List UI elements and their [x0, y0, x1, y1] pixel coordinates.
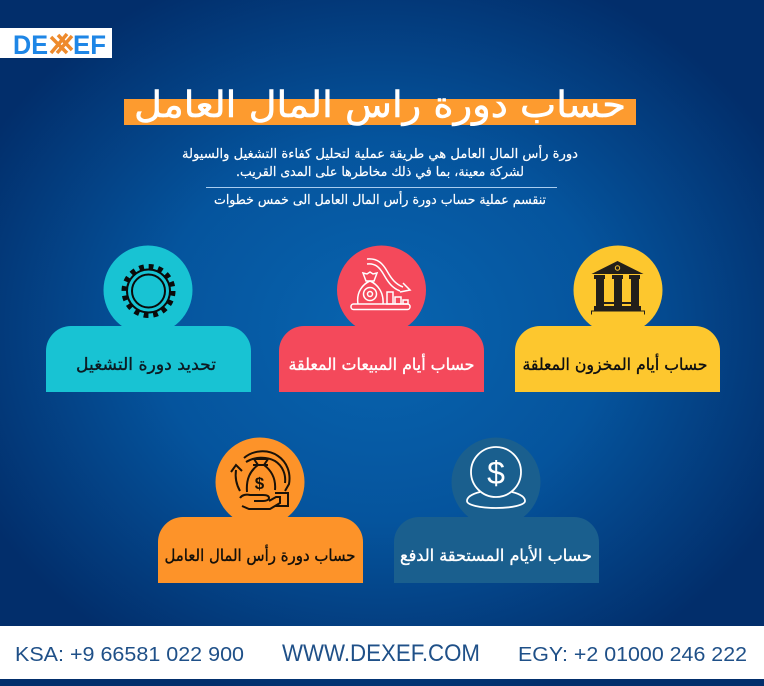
title: حساب دورة راس المال العامل	[134, 85, 626, 126]
footer contact bar: EGY: +2 01000 246 222	[518, 643, 747, 666]
card: days payable outstanding: $	[487, 455, 505, 491]
card: days payable outstanding	[394, 438, 599, 583]
footer contact bar	[0, 626, 764, 679]
icon: gear	[124, 266, 173, 316]
card: days sales outstanding: حساب أيام المبيعات المعلقة	[288, 353, 474, 374]
card: determine operating cycle	[46, 246, 251, 392]
subheading: تنقسم عملية حساب دورة رأس المال العامل الى خمس خطوات	[214, 191, 546, 208]
card: working capital cycle	[158, 438, 363, 583]
logo: DEXEF: DE	[13, 30, 48, 60]
footer contact bar: KSA: +9 66581 022 900	[15, 643, 244, 666]
intro text	[182, 145, 578, 180]
intro text: لشركة معينة، بما في ذلك مخاطرها على المدى القريب.	[236, 165, 524, 180]
card: working capital cycle: حساب دورة رأس المال العامل	[164, 544, 356, 566]
card: determine operating cycle: تحديد دورة التشغيل	[76, 355, 216, 375]
logo: DEXEF: EF	[73, 30, 106, 60]
card: days payable outstanding: حساب الأيام المستحقة الدفع	[400, 545, 592, 566]
card: days inventory outstanding: حساب أيام المخزون المعلقة	[522, 353, 708, 375]
logo: DEXEF	[0, 28, 112, 60]
card: working capital cycle: $	[255, 474, 265, 493]
icon: money bag with falling chart	[351, 259, 410, 310]
icon: money bag on hand with cycle arrows	[231, 451, 290, 509]
icon: bank building	[591, 261, 645, 314]
footer contact bar: WWW.DEXEF.COM	[282, 640, 480, 667]
card: days inventory outstanding	[515, 246, 720, 392]
icon: dollar coin on ring	[467, 447, 525, 508]
card: days sales outstanding	[279, 246, 484, 392]
intro text: دورة رأس المال العامل هي طريقة عملية لتحليل كفاءة التشغيل والسيولة	[182, 145, 578, 162]
